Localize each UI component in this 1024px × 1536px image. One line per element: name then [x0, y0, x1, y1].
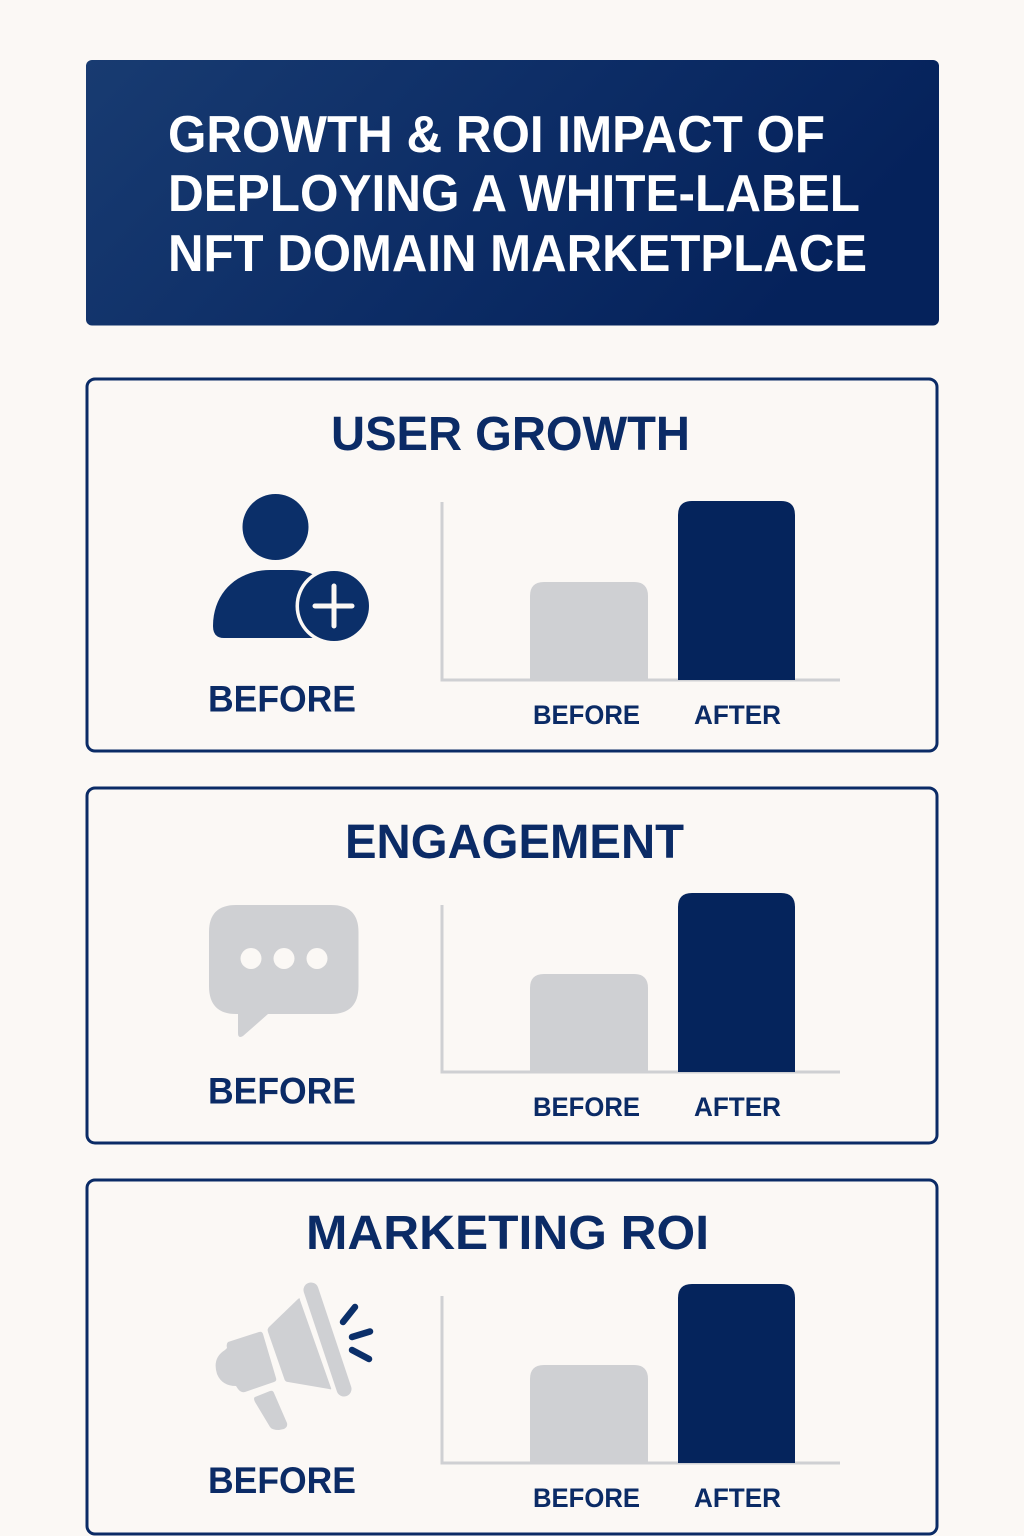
icon: megaphone: [216, 1290, 370, 1430]
bar chart: engagement: [442, 893, 840, 1122]
bar chart: engagement: AFTER: [694, 1092, 781, 1122]
bar chart: user growth: [442, 501, 840, 730]
label: before: BEFORE: [208, 678, 356, 720]
icon: speech bubble: [209, 905, 358, 1037]
title: DEPLOYING A WHITE-LABEL: [168, 165, 860, 223]
bar chart: user growth: BEFORE: [533, 700, 640, 730]
bar chart: marketing roi: BEFORE: [533, 1483, 640, 1513]
bar chart: marketing roi: [442, 1284, 840, 1513]
title: [168, 106, 867, 283]
label: before: BEFORE: [208, 1070, 356, 1112]
heading: marketing roi: MARKETING ROI: [306, 1207, 709, 1260]
panel: engagement: [87, 788, 937, 1143]
bar chart: marketing roi: AFTER: [694, 1483, 781, 1513]
heading: user growth: USER GROWTH: [331, 408, 690, 461]
bar chart: engagement: BEFORE: [533, 1092, 640, 1122]
title banner: [86, 60, 939, 326]
label: before: BEFORE: [208, 1460, 356, 1501]
bar chart: user growth: AFTER: [694, 700, 781, 730]
title: GROWTH & ROI IMPACT OF: [168, 106, 825, 164]
panel: marketing roi: [87, 1180, 937, 1534]
icon: user with plus: [213, 494, 372, 644]
title: NFT DOMAIN MARKETPLACE: [168, 225, 867, 283]
panel: user growth: [87, 379, 937, 751]
heading: engagement: ENGAGEMENT: [345, 816, 684, 869]
